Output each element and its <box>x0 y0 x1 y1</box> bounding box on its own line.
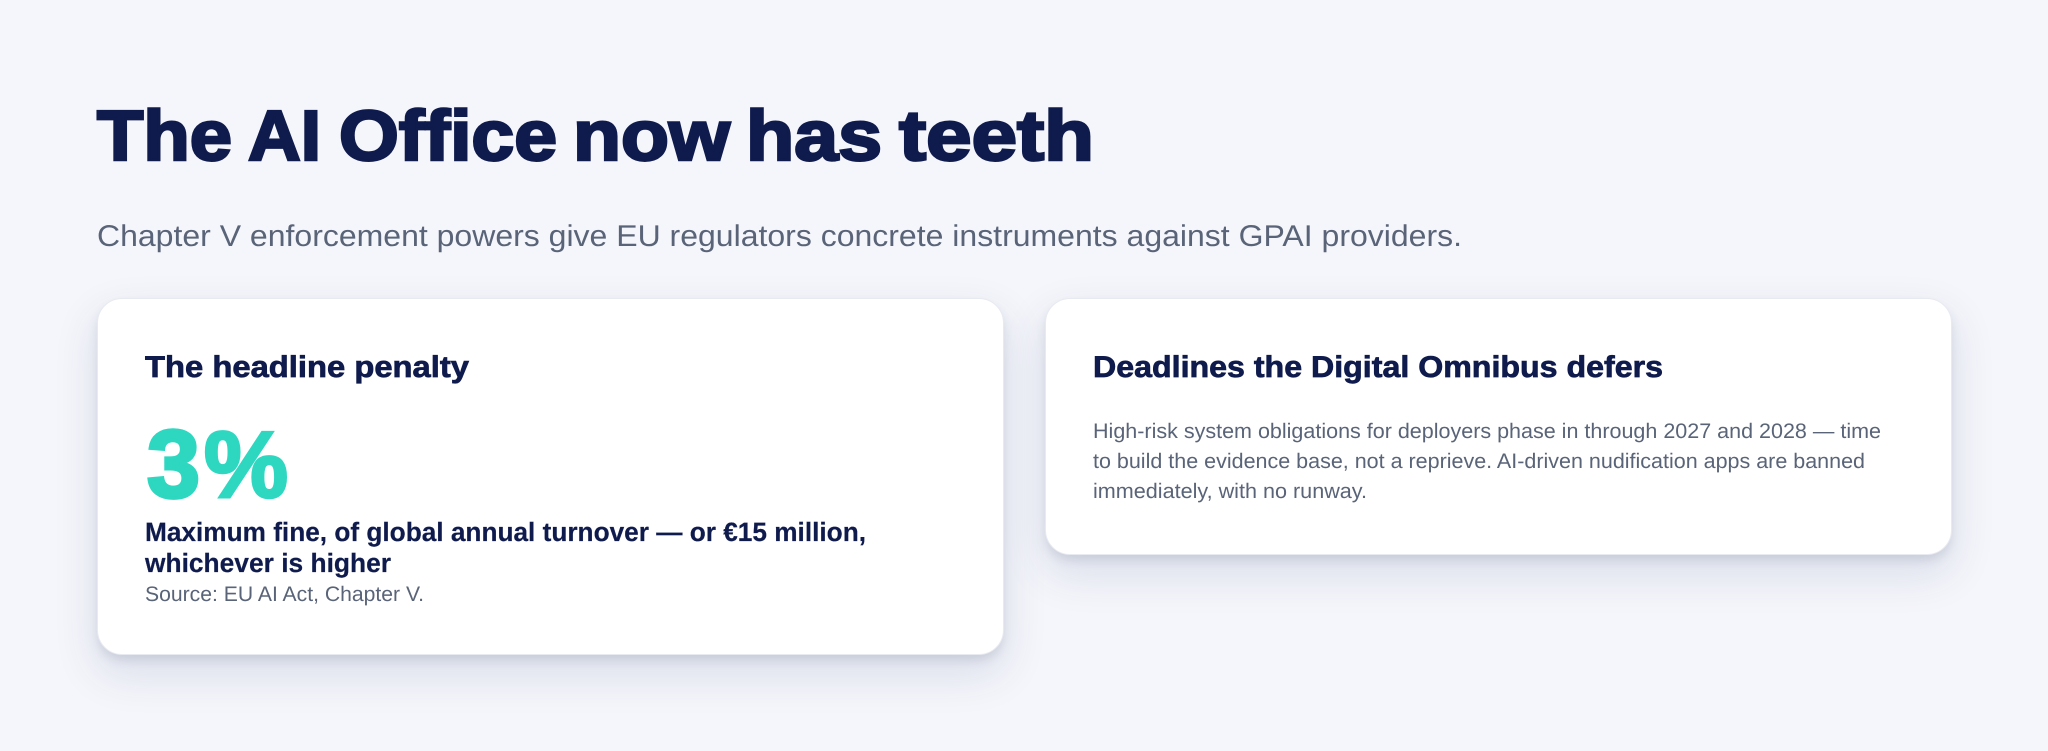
title: now <box>573 97 731 176</box>
stat description: Maximum fine, of global annual turnover — or €15 million, <box>145 517 866 547</box>
stat description: whichever is higher <box>144 548 391 578</box>
big stat: 3%: 3 <box>147 411 200 518</box>
title <box>97 97 1094 176</box>
subtitle: Chapter V enforcement powers give EU regulators concrete instruments against GPAI providers. <box>97 220 1462 253</box>
card 1 heading: The headline penalty <box>145 351 469 384</box>
card 2 body text: to build the evidence base, not a reprieve. AI-driven nudification apps are banned <box>1093 450 1865 473</box>
card 2 heading: Deadlines the Digital Omnibus defers <box>1093 351 1663 384</box>
panel: the headline penalty <box>96 298 1004 655</box>
title: The <box>97 97 232 176</box>
stat description <box>144 517 866 578</box>
big stat: 3%: % <box>204 412 288 517</box>
big stat: 3% <box>147 411 288 518</box>
title: teeth <box>899 97 1094 176</box>
title: Office <box>339 97 557 176</box>
card 2 body text <box>1093 420 1881 503</box>
source note: Source: EU AI Act, Chapter V. <box>145 583 424 606</box>
title: has <box>746 97 882 176</box>
panel: deadlines the Digital Omnibus defers <box>1044 298 1952 555</box>
title: AI <box>248 97 321 176</box>
card 2 body text: High-risk system obligations for deployers phase in through 2027 and 2028 — time <box>1093 420 1881 443</box>
card 2 body text: immediately, with no runway. <box>1093 480 1367 503</box>
